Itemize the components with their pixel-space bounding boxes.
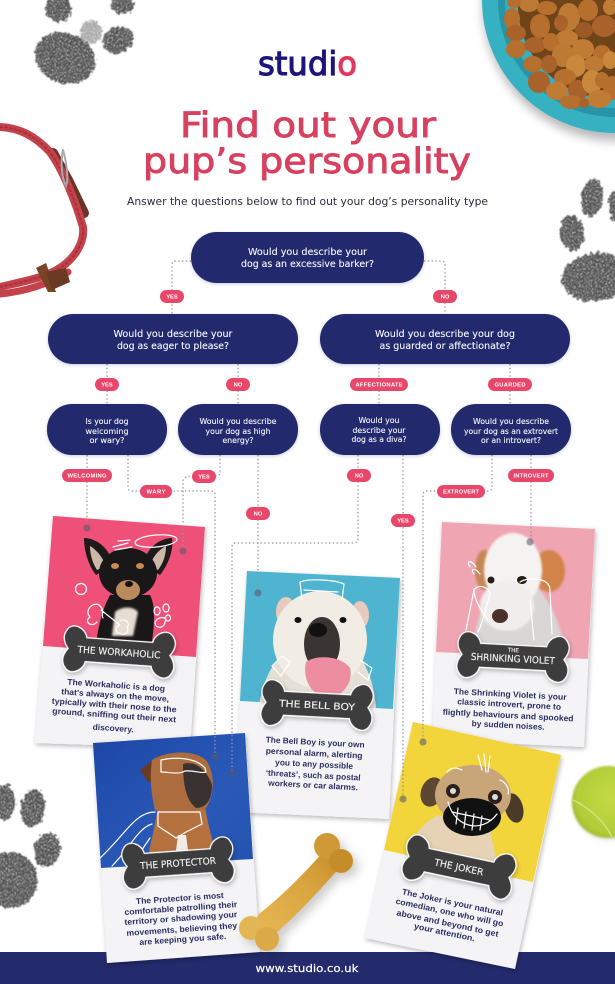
dog: pug [408, 765, 524, 862]
answer labels: WARY [146, 490, 166, 496]
description: ground, sniffing out their next [52, 706, 177, 724]
dog: bulldog [258, 591, 376, 712]
question: excessive barker: Would you describe your [248, 247, 368, 258]
doodles [447, 754, 508, 830]
panel: The Workaholic card [35, 516, 205, 748]
answer labels: INTROVERT [514, 474, 549, 480]
name bone: THE [507, 648, 519, 654]
question: high energy: energy? [222, 435, 254, 445]
question: extrovert or introvert: your dog as an extrovert [464, 426, 559, 436]
description: movements, believing they [126, 920, 238, 938]
doodles [76, 533, 177, 634]
question: diva: dog as a diva? [352, 434, 406, 444]
description [52, 677, 177, 734]
description: above and beyond to get [396, 907, 500, 939]
question: extrovert or introvert: Would you describe [473, 416, 549, 426]
title: Find out your [180, 106, 437, 146]
question: welcoming or wary [47, 404, 167, 455]
title: pup’s personality [143, 142, 471, 182]
question: high energy: Would you describe [200, 416, 276, 426]
answer labels: GUARDED [494, 383, 526, 389]
question: eager to please: dog as eager to please? [117, 341, 229, 352]
question: guarded or affectionate: as guarded or affectionate? [380, 341, 510, 352]
footer bar [0, 952, 615, 984]
description [265, 734, 365, 792]
description: The Bell Boy is your own [265, 734, 365, 750]
name bone [260, 679, 374, 731]
panel: The Bell Boy card [234, 571, 400, 819]
question: welcoming or wary: welcoming [86, 426, 128, 436]
name bone [121, 836, 235, 890]
name bone: THE PROTECTOR [139, 856, 217, 872]
description: personal alarm, alerting [265, 745, 363, 761]
footer bar: www.studio.co.uk [256, 962, 359, 975]
doodles [466, 562, 552, 640]
answer labels: NO [441, 295, 450, 301]
dog: chihuahua [84, 538, 172, 642]
answer labels: YES [101, 383, 113, 389]
icon: red collar [0, 127, 84, 294]
question: high energy [178, 404, 298, 455]
answer labels: AFFECTIONATE [356, 383, 403, 389]
question: high energy: your dog as high [206, 426, 270, 436]
dog: scruffy white terrier [472, 533, 565, 655]
icon: paw print top left [27, 0, 138, 92]
name bone: THE WORKAHOLIC [76, 645, 161, 661]
description: classic introvert, prone to [457, 696, 561, 712]
question: excessive barker: dog as an excessive barker? [241, 259, 374, 270]
question: guarded or affectionate: Would you describe your dog [375, 329, 515, 340]
dog: boxer [140, 752, 213, 852]
icon: dog bowl with kibble [482, 0, 615, 141]
question: welcoming or wary: Is your dog [86, 416, 128, 426]
description: typically with their nose to the [52, 696, 177, 714]
description [442, 686, 574, 732]
description: are keeping you safe. [139, 931, 227, 947]
question: guarded or affectionate [320, 314, 570, 364]
name bone [62, 625, 176, 679]
answer labels: NO [355, 474, 364, 480]
question: diva: describe your [352, 425, 406, 435]
question: extrovert or introvert: or an introvert? [481, 435, 541, 445]
icon: paw print right [558, 178, 615, 305]
question: diva: Would you [358, 415, 400, 425]
icon: paw print bottom left [0, 784, 64, 917]
description [395, 886, 504, 943]
description: you to any possible [275, 757, 354, 771]
question: welcoming or wary: or wary? [90, 435, 124, 445]
description [124, 890, 238, 947]
title [143, 106, 471, 182]
answer labels: NO [234, 383, 243, 389]
question: extrovert or introvert [451, 404, 571, 455]
description: workers or car alarms. [267, 778, 358, 792]
panel: The Shrinking Violet card [432, 522, 595, 747]
answer labels: YES [198, 475, 210, 481]
answer labels: NO [254, 512, 263, 518]
icon: chew bone [239, 833, 353, 951]
name bone: THE BELL BOY [278, 698, 355, 713]
logo: studio [258, 44, 357, 83]
panel: The Protector card [93, 733, 260, 963]
description: your attention. [413, 921, 476, 943]
description: comedian, one who will go [395, 896, 504, 928]
answer labels [62, 290, 554, 527]
question: diva [320, 404, 440, 455]
icon: tennis ball [572, 766, 615, 840]
flowchart connectors [83, 261, 534, 803]
doodles [272, 580, 372, 680]
description: territory or shadowing your [124, 909, 238, 927]
question: eager to please [48, 314, 298, 364]
name bone: SHRINKING VIOLET [471, 652, 555, 667]
question: excessive barker [191, 232, 424, 283]
description: The Workaholic is a dog [67, 677, 165, 693]
answer labels: EXTROVERT [443, 490, 479, 496]
name bone [400, 833, 518, 901]
panel: The Joker card [365, 722, 561, 969]
name bone [456, 631, 570, 683]
doodles [100, 758, 206, 866]
description: The Joker is your natural [401, 886, 504, 918]
description: discovery. [92, 722, 134, 734]
description: The Protector is most [136, 890, 224, 906]
description: The Shrinking Violet is your [453, 686, 568, 702]
subtitle: Answer the questions below to find out your dog’s personality type [127, 195, 488, 208]
answer labels: WELCOMING [68, 474, 107, 480]
description: ‘threats’, such as postal [265, 768, 361, 782]
description: that's always on the move, [61, 686, 169, 704]
name bone: THE JOKER [432, 857, 485, 879]
question: eager to please: Would you describe your [114, 329, 233, 340]
description: comfortable patrolling their [124, 899, 238, 917]
answer labels: YES [397, 519, 409, 525]
answer labels: YES [166, 295, 178, 301]
description: by sudden noises. [471, 718, 545, 732]
description: flightly behaviours and spooked [442, 707, 574, 723]
